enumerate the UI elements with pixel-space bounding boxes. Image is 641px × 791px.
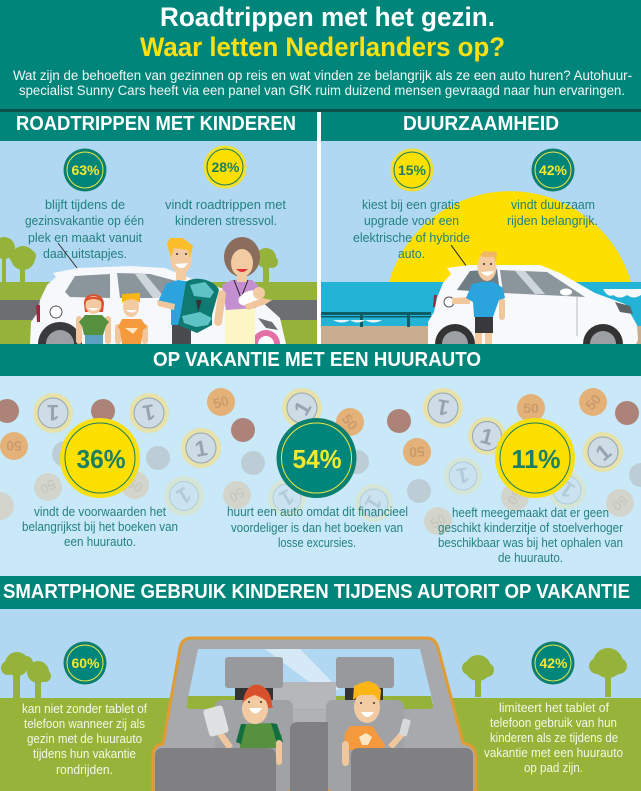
text 42%: limiteert het tablet of bbox=[499, 700, 609, 715]
stat 42% bbox=[532, 642, 574, 684]
coins: 1 bbox=[435, 394, 451, 421]
panel: duurzaamheid bbox=[321, 112, 641, 344]
text 54% bbox=[227, 504, 408, 550]
stat 60%: 60% bbox=[71, 655, 100, 671]
stat 28%: 28% bbox=[211, 159, 240, 175]
rear window bbox=[187, 649, 433, 709]
coins: 1 bbox=[193, 435, 209, 462]
text 63% bbox=[25, 197, 144, 261]
railing bbox=[321, 312, 431, 327]
text 60%: tijdens hun vakantie bbox=[33, 746, 136, 761]
stat 42% bbox=[532, 148, 574, 192]
coins: 1 bbox=[172, 482, 195, 509]
text 11%: geschikt kinderzitje of stoelverhoger bbox=[438, 520, 624, 535]
heading bbox=[0, 344, 641, 376]
coins: 1 bbox=[555, 476, 579, 503]
text 36%: belangrijkst bij het boeken van bbox=[22, 519, 178, 534]
icon: sun bbox=[389, 191, 631, 282]
person: mother bbox=[214, 237, 272, 344]
subtitle: Waar letten Nederlanders op? bbox=[140, 32, 505, 62]
text 54%: losse excursies. bbox=[278, 535, 356, 550]
text 11% bbox=[438, 505, 624, 565]
coins: 1 bbox=[591, 439, 616, 466]
person: girl with tablet bbox=[203, 685, 283, 765]
coins: 50 bbox=[124, 474, 146, 496]
icon: trees left bbox=[0, 237, 36, 282]
panel: op vakantie met een huurauto bbox=[0, 344, 641, 576]
text 60%: telefoon wanneer zij als bbox=[24, 716, 145, 731]
text 15% bbox=[353, 197, 470, 261]
text 54%: voordeliger is dan het boeken van bbox=[231, 520, 403, 535]
text 36%: vindt de voorwaarden het bbox=[34, 504, 166, 519]
stat 54% bbox=[276, 418, 356, 498]
text 28%: vindt roadtrippen met bbox=[165, 197, 286, 212]
car interior bbox=[153, 638, 476, 791]
intro text: specialist Sunny Cars heeft via een panel van GfK ruim duizend mensen gevraagd naar hun ervaringen. bbox=[19, 83, 625, 98]
text 60%: rondrijden. bbox=[56, 762, 113, 777]
boat bbox=[603, 289, 641, 298]
person: father bbox=[157, 238, 195, 344]
stat 54%: 54% bbox=[292, 444, 342, 474]
heading: ROADTRIPPEN MET KINDEREN bbox=[16, 113, 296, 135]
stat 60% bbox=[64, 642, 106, 684]
text 54%: huurt een auto omdat dit financieel bbox=[227, 504, 408, 519]
person: man bbox=[452, 251, 505, 344]
coins: 50 bbox=[339, 411, 361, 433]
text 60%: gezin met de huurauto bbox=[27, 731, 142, 746]
intro text: Wat zijn de behoeften van gezinnen op reis en wat vinden ze belangrijk als ze een auto huren? Autohuur- bbox=[13, 68, 632, 83]
text 15%: elektrische of hybride bbox=[353, 230, 470, 245]
stat 63%: 63% bbox=[71, 162, 100, 178]
text 15%: auto. bbox=[398, 246, 425, 261]
text 42% bbox=[484, 700, 623, 775]
coins: 50 bbox=[226, 484, 248, 506]
text 42%: vindt duurzaam bbox=[511, 197, 595, 212]
text 42%: telefoon gebruik van hun bbox=[490, 715, 617, 730]
headrests bbox=[225, 657, 394, 700]
stat 11%: 11% bbox=[512, 444, 560, 474]
heading: OP VAKANTIE MET EEN HUURAUTO bbox=[153, 349, 481, 371]
coins: 1 bbox=[47, 400, 59, 425]
person: boy bbox=[115, 293, 148, 344]
text 36% bbox=[22, 504, 178, 549]
rear bench bbox=[215, 700, 404, 791]
text 28%: kinderen stressvol. bbox=[175, 213, 277, 228]
header band bbox=[0, 0, 641, 109]
text 42% bbox=[507, 197, 598, 228]
text 36%: een huurauto. bbox=[64, 534, 136, 549]
text 60% bbox=[22, 701, 147, 777]
stat 36%: 36% bbox=[76, 444, 126, 474]
text 42%: op pad zijn. bbox=[524, 760, 583, 775]
coins: 50 bbox=[504, 486, 526, 508]
car: white family car bbox=[30, 243, 286, 344]
text 28% bbox=[165, 197, 286, 228]
heading: DUURZAAMHEID bbox=[403, 113, 559, 135]
text 11%: heeft meegemaakt dat er geen bbox=[452, 505, 609, 520]
coins: 50 bbox=[37, 476, 59, 498]
front seats bbox=[155, 722, 473, 791]
text 63%: gezinsvakantie op één bbox=[25, 213, 144, 228]
text 15%: kiest bij een gratis bbox=[362, 197, 460, 212]
text 15%: upgrade voor een bbox=[364, 213, 459, 228]
car: white electric car bbox=[428, 245, 638, 344]
coins: 50 bbox=[427, 510, 449, 532]
text 63%: blijft tijdens de bbox=[45, 197, 125, 212]
heading bbox=[0, 576, 641, 609]
text 63%: plek en maakt vanuit bbox=[28, 230, 142, 245]
text 11%: de huurauto. bbox=[498, 550, 563, 565]
title: Roadtrippen met het gezin. bbox=[160, 2, 495, 32]
stat 11% bbox=[495, 418, 575, 498]
icon: child seat bbox=[178, 279, 219, 333]
intro text bbox=[13, 68, 632, 98]
coins: 1 bbox=[141, 399, 157, 426]
stat 15% bbox=[390, 148, 434, 192]
person: girl bbox=[76, 294, 111, 344]
stat 63% bbox=[64, 148, 106, 192]
icon: trees left bbox=[1, 652, 51, 698]
coins: 1 bbox=[289, 397, 316, 420]
text 42%: rijden belangrijk. bbox=[507, 213, 598, 228]
coins: 1 bbox=[455, 462, 471, 489]
panel: roadtrippen met kinderen bbox=[0, 112, 317, 344]
stat 42%: 42% bbox=[539, 655, 568, 671]
coins: 50 bbox=[523, 400, 539, 416]
coins: 50 bbox=[211, 392, 231, 412]
heading bbox=[321, 112, 641, 141]
coins: 1 bbox=[360, 491, 387, 514]
stat 36% bbox=[60, 418, 140, 498]
coins: 50 bbox=[582, 391, 604, 413]
coins bbox=[0, 388, 641, 535]
text 60%: kan niet zonder tablet of bbox=[22, 701, 147, 716]
text 42%: vakantie met een huurauto bbox=[484, 745, 623, 760]
text 42%: kinderen als ze tijdens de bbox=[490, 730, 618, 745]
stat 15%: 15% bbox=[398, 162, 427, 178]
stat 42%: 42% bbox=[539, 162, 568, 178]
stat 28% bbox=[204, 146, 246, 188]
coins: 50 bbox=[6, 438, 22, 454]
text 63%: daar uitstapjes. bbox=[43, 246, 127, 261]
coins: 1 bbox=[478, 423, 496, 450]
icon: trees right bbox=[462, 648, 627, 697]
coins: 50 bbox=[609, 492, 631, 514]
person: boy with phone bbox=[342, 681, 411, 766]
coins: 1 bbox=[275, 484, 298, 511]
icon: tree right bbox=[256, 248, 278, 282]
panel: smartphone gebruik bbox=[0, 576, 641, 791]
coins: 50 bbox=[408, 443, 425, 461]
